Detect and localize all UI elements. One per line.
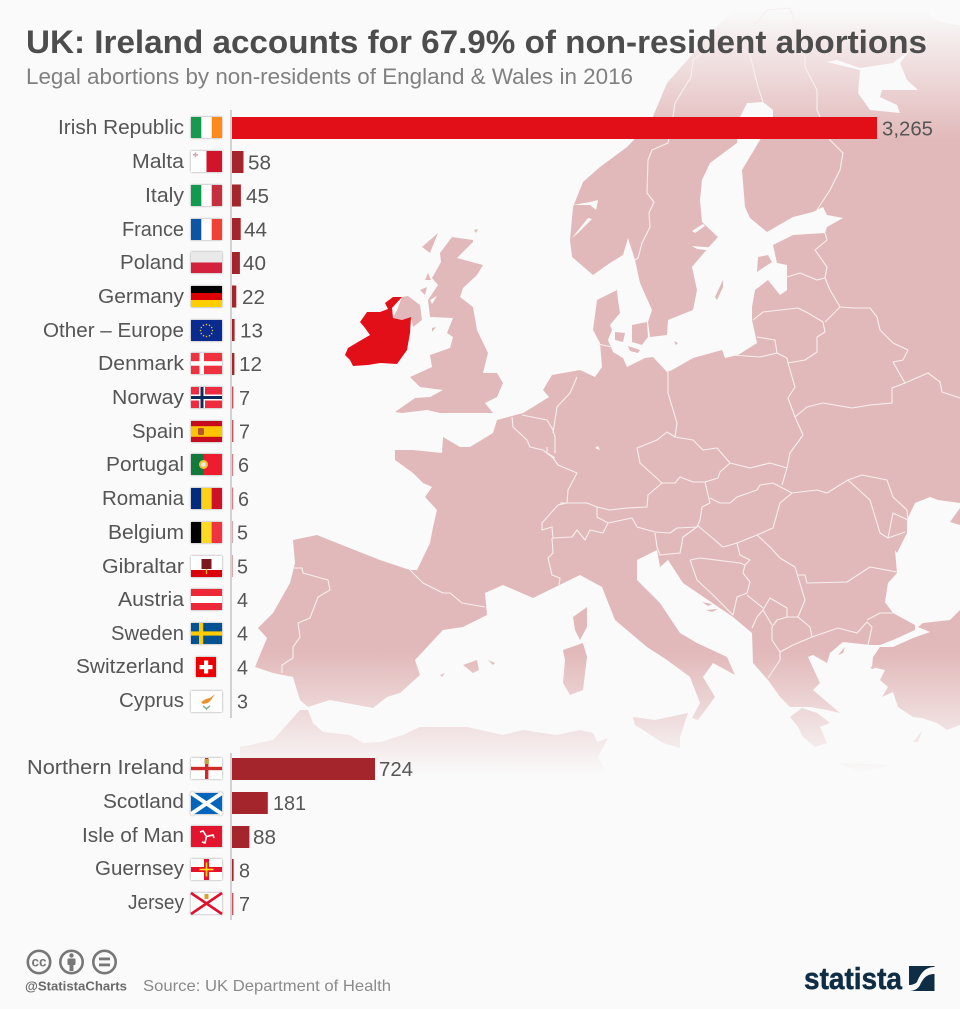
- value: 5: [237, 522, 248, 544]
- bar: [232, 454, 233, 476]
- label: Jersey: [128, 892, 184, 914]
- flag: Portugal: [191, 454, 222, 475]
- label: Northern Ireland: [27, 757, 184, 779]
- row: Irish Republic: [58, 117, 933, 140]
- value: 3: [237, 692, 248, 714]
- value: 40: [243, 253, 266, 275]
- row: Spain: [132, 420, 250, 444]
- label: Sweden: [111, 623, 184, 645]
- value: 8: [239, 860, 250, 882]
- bar: [232, 117, 877, 139]
- label: Gibraltar: [102, 556, 184, 578]
- label: Cyprus: [119, 690, 184, 712]
- bar: [232, 792, 268, 814]
- flag: Scotland: [191, 793, 222, 814]
- value: 45: [246, 186, 269, 208]
- bar: [232, 386, 233, 408]
- value: 4: [237, 658, 248, 680]
- bar: [232, 151, 244, 173]
- flag: EU: [191, 320, 222, 341]
- axis line: UK group: [230, 753, 232, 920]
- label: Italy: [145, 185, 184, 207]
- label: Romania: [102, 488, 185, 510]
- label: Scotland: [103, 791, 184, 813]
- icon: Creative Commons licence: cc: [31, 954, 47, 970]
- flag: Austria: [191, 589, 222, 610]
- value: 4: [237, 590, 248, 612]
- flag: Ireland: [191, 117, 222, 138]
- flag: Cyprus: [191, 691, 222, 712]
- bar: [232, 184, 241, 206]
- flag: Jersey: [191, 893, 222, 914]
- value: 13: [240, 320, 263, 342]
- value: 88: [253, 827, 276, 849]
- bar: [232, 521, 233, 543]
- value: 4: [237, 624, 248, 646]
- flag: Northern Ireland: [191, 758, 222, 779]
- row: Switzerland: [76, 656, 248, 680]
- value: 5: [237, 556, 248, 578]
- row: France: [122, 218, 267, 242]
- flag: Malta: [191, 151, 222, 172]
- flag: Guernsey: [191, 859, 222, 880]
- flag: Italy: [191, 185, 222, 206]
- label: Norway: [112, 387, 184, 409]
- flag: France: [191, 219, 222, 240]
- credit handle: @StatistaCharts: [25, 978, 127, 994]
- label: Germany: [98, 286, 184, 308]
- row: Malta: [132, 151, 271, 174]
- flag: Poland: [191, 252, 222, 273]
- bar: [232, 252, 240, 274]
- bar: [232, 893, 233, 915]
- flag: Romania: [191, 488, 222, 509]
- flag: Denmark: [191, 353, 222, 374]
- label: Other – Europe: [43, 320, 184, 342]
- flag: Norway: [191, 387, 222, 408]
- label: Denmark: [98, 353, 185, 375]
- title: UK: Ireland accounts for 67.9% of non-resident abortions: [26, 24, 927, 60]
- value: 7: [239, 422, 250, 444]
- bar: [232, 218, 241, 240]
- label: Spain: [132, 421, 184, 443]
- bar: [232, 555, 233, 577]
- value: 12: [239, 354, 262, 376]
- label: Poland: [120, 252, 184, 274]
- label: Guernsey: [95, 858, 184, 880]
- flag: Spain: [191, 421, 222, 442]
- value: 724: [379, 759, 413, 781]
- value: 7: [239, 388, 250, 410]
- row: Gibraltar: [102, 555, 248, 578]
- flag: Germany: [191, 286, 222, 307]
- statista logo: statista: [804, 961, 903, 996]
- row: Portugal: [106, 454, 249, 477]
- row: Guernsey: [95, 858, 250, 882]
- map: Republic of Ireland highlighted: [345, 297, 411, 366]
- source: Source: UK Department of Health: [143, 978, 391, 995]
- row: Northern Ireland: [27, 757, 413, 781]
- row: Other – Europe: [43, 319, 263, 342]
- row: Sweden: [111, 623, 248, 646]
- bar: [232, 826, 249, 848]
- map: Great Britain: [395, 229, 503, 413]
- bar: [232, 286, 236, 308]
- row: Belgium: [108, 521, 248, 544]
- row: Austria: [118, 589, 248, 612]
- row: Norway: [112, 386, 250, 410]
- map of Europe: [240, 0, 960, 775]
- bar: [232, 319, 235, 341]
- row: Denmark: [98, 353, 262, 376]
- value: 181: [273, 793, 306, 815]
- map: country borders: [282, 8, 960, 678]
- row: Germany: [98, 286, 265, 309]
- flag: Gibraltar: [191, 556, 222, 577]
- label: Austria: [118, 589, 185, 611]
- value: 3,265: [882, 118, 933, 140]
- label: Switzerland: [76, 656, 184, 678]
- value: 22: [242, 287, 265, 309]
- label: Irish Republic: [58, 117, 184, 139]
- row: Italy: [145, 184, 269, 208]
- label: Belgium: [108, 522, 184, 544]
- icon: Creative Commons licence: [28, 951, 116, 973]
- axis line: non-UK group: [230, 110, 232, 718]
- label: Portugal: [106, 454, 184, 476]
- bar: [232, 353, 234, 375]
- row: Jersey: [128, 892, 250, 916]
- row: Isle of Man: [82, 825, 276, 849]
- row: Poland: [120, 252, 266, 275]
- map: Northern Ireland: [393, 296, 422, 327]
- bar: [232, 758, 375, 780]
- label: Isle of Man: [82, 825, 184, 847]
- flag: Belgium: [191, 522, 222, 543]
- row: Cyprus: [119, 690, 248, 714]
- bar: [232, 859, 234, 881]
- bar: [232, 488, 233, 510]
- label: Malta: [132, 151, 185, 173]
- value: 44: [244, 220, 267, 242]
- flag: Isle of Man: [191, 826, 222, 847]
- subtitle: Legal abortions by non-residents of England & Wales in 2016: [26, 64, 633, 89]
- value: 6: [238, 455, 249, 477]
- flag: Sweden: [191, 623, 222, 644]
- row: Scotland: [103, 791, 306, 815]
- row: Romania: [102, 488, 249, 511]
- value: 6: [238, 489, 249, 511]
- flag: Switzerland: [196, 657, 216, 677]
- bar: [232, 420, 233, 442]
- value: 58: [248, 152, 271, 174]
- label: France: [122, 219, 184, 241]
- value: 7: [239, 894, 250, 916]
